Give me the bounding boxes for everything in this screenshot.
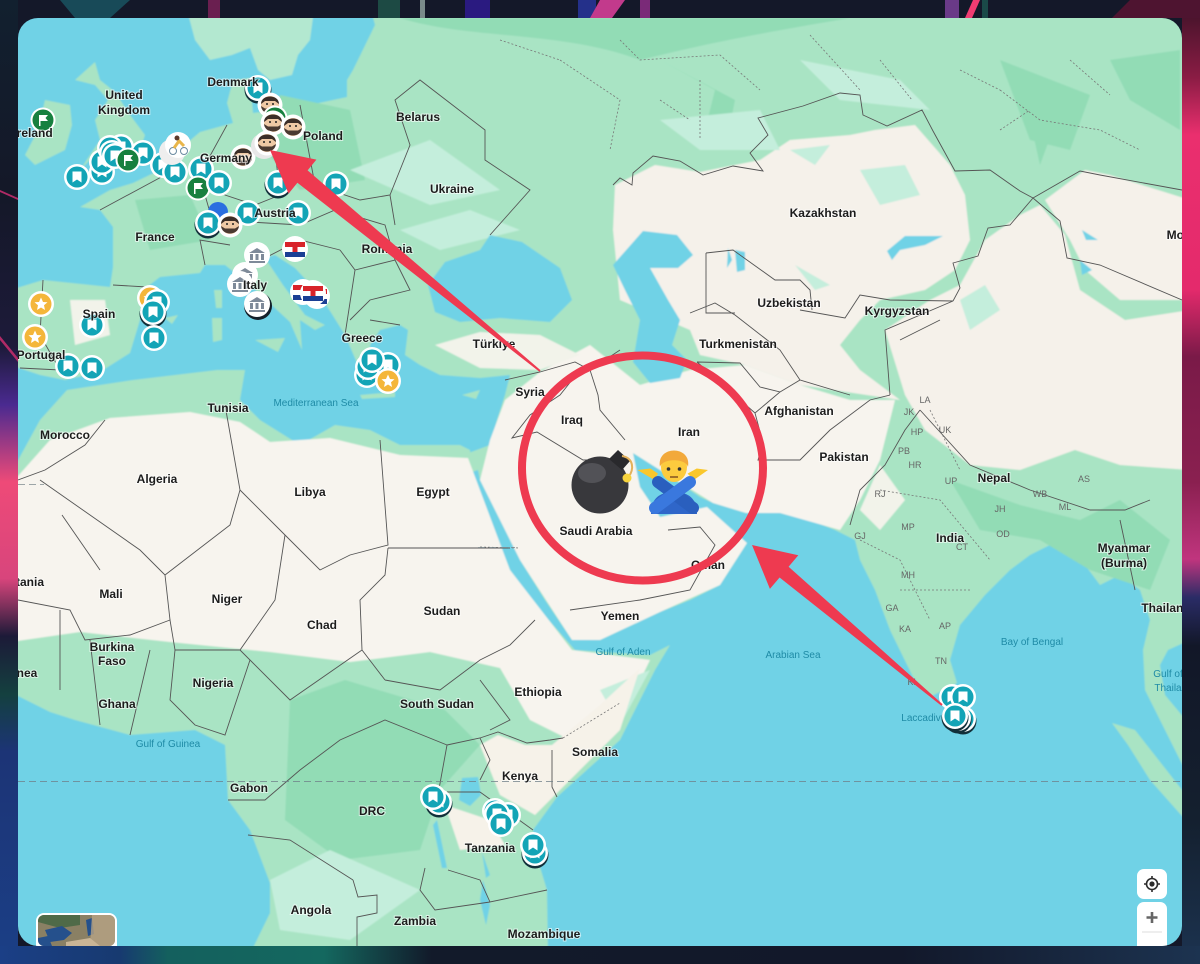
country labels: Kyrgyzstan [865, 304, 929, 318]
country labels: Ghana [98, 697, 136, 711]
country labels: Faso [98, 654, 126, 668]
state codes: AS [1078, 474, 1090, 484]
country labels: Saudi Arabia [560, 524, 633, 538]
state codes: OD [996, 529, 1010, 539]
country labels: Thailand [1141, 601, 1191, 615]
country labels: Syria [515, 385, 545, 399]
country labels: Nigeria [193, 676, 234, 690]
emoji: man gesturing no [642, 450, 704, 514]
country labels: Myanmar [1098, 541, 1151, 555]
state codes: AP [939, 621, 951, 631]
country labels: Libya [294, 485, 326, 499]
land: Africa [10, 370, 670, 954]
land: Mongolia and Gobi [1045, 170, 1190, 300]
state codes [854, 395, 1090, 687]
country labels: Belarus [396, 110, 440, 124]
country labels: Sudan [424, 604, 460, 618]
satellite thumbnail [36, 913, 117, 958]
country labels: Portugal [17, 348, 65, 362]
country labels: Denmark [207, 75, 259, 89]
land: Arabia and Middle East [480, 345, 895, 640]
state codes: JK [904, 407, 914, 417]
country labels: Nepal [978, 471, 1010, 485]
land: Turkey and Iberia dry areas [70, 300, 905, 530]
country labels: DRC [359, 804, 385, 818]
control: zoom buttons [1137, 902, 1167, 946]
country labels: Somalia [572, 745, 618, 759]
country labels: Iran [678, 425, 700, 439]
markers: Sri Lanka [939, 684, 976, 734]
country labels: Türkiye [473, 337, 516, 351]
country labels: United [105, 88, 143, 102]
country labels: Angola [291, 903, 332, 917]
state codes: MP [901, 522, 915, 532]
country labels: Pakistan [819, 450, 869, 464]
country labels: Ireland [13, 126, 53, 140]
state codes: GA [885, 603, 899, 613]
country labels: Kenya [502, 769, 538, 783]
black sea [428, 235, 572, 322]
red arrow to Oman [752, 545, 943, 706]
tropic dashed line [18, 484, 515, 548]
land: Scandinavia [188, 18, 314, 80]
country labels: Tunisia [207, 401, 249, 415]
country labels: France [135, 230, 175, 244]
country labels: Austria [254, 206, 296, 220]
country labels: Turkmenistan [699, 337, 777, 351]
sea labels: Laccadiv [901, 713, 941, 724]
state codes: JH [994, 504, 1006, 514]
country labels: Tanzania [465, 841, 516, 855]
land: Ethiopia and East Africa dry bands [445, 668, 640, 850]
markers: Iberia [22, 285, 170, 381]
markers: western Europe [30, 75, 349, 238]
state codes: CT [956, 542, 968, 552]
land: Sahara desert [10, 412, 650, 750]
country labels: Burkina [90, 640, 135, 654]
state codes: HR [908, 460, 922, 470]
caspian sea [613, 231, 693, 383]
country labels: Kazakhstan [790, 206, 856, 220]
marker: cyclist [159, 132, 191, 165]
sea labels: Gulf of Guinea [136, 739, 201, 750]
state codes: HP [911, 427, 923, 437]
sea labels: Bay of Bengal [1001, 637, 1063, 648]
country labels: Ethiopia [514, 685, 562, 699]
state codes: ML [1059, 502, 1071, 512]
sea labels: Gulf of [1153, 669, 1183, 680]
country labels: (Burma) [1101, 556, 1147, 570]
country labels: Afghanistan [764, 404, 834, 418]
markers: East Africa [420, 784, 548, 868]
country labels: Niger [212, 592, 243, 606]
sea labels: Arabian Sea [765, 650, 821, 661]
state codes: LA [919, 395, 931, 405]
control: locate button [1137, 869, 1167, 899]
country labels: Romania [362, 242, 413, 256]
sea labels: Mediterranean Sea [273, 398, 359, 409]
country labels: Morocco [40, 428, 90, 442]
state codes: TN [935, 656, 947, 666]
state codes: GJ [854, 531, 866, 541]
country labels: Zambia [394, 914, 436, 928]
country labels: Egypt [416, 485, 450, 499]
country labels: South Sudan [400, 697, 474, 711]
red arrow to Germany [270, 150, 541, 372]
country labels: Uzbekistan [757, 296, 821, 310]
country labels: Ukraine [430, 182, 474, 196]
sea labels [136, 398, 1183, 750]
country labels: Poland [303, 129, 343, 143]
country labels: Germany [200, 151, 252, 165]
country labels: Italy [243, 278, 267, 292]
sea labels: Thaila [1154, 683, 1182, 694]
land: green vegetation patches [135, 18, 1180, 860]
markers: profile faces [218, 92, 306, 238]
markers: Greece [354, 347, 401, 394]
country labels: Iraq [561, 413, 583, 427]
state codes: PB [898, 446, 910, 456]
land: Eurasia [10, 10, 1190, 780]
markers: Italy and Croatia [227, 236, 330, 320]
land: Great Britain and Ireland [25, 62, 145, 170]
equator dashed line [18, 781, 1180, 782]
country labels: India [936, 531, 964, 545]
country labels: Spain [83, 307, 115, 321]
state codes: MH [901, 570, 915, 580]
country labels: Algeria [137, 472, 178, 486]
country labels: Gabon [230, 781, 268, 795]
lakes [433, 230, 1098, 925]
sea labels: Gulf of Aden [595, 647, 651, 658]
country labels: Oman [691, 558, 725, 572]
land: Tibet and Xinjiang plateau [885, 205, 1190, 470]
country labels: Yemen [601, 609, 639, 623]
country labels: Mozambique [508, 927, 581, 941]
state codes: WB [1033, 489, 1047, 499]
country labels: Mali [99, 587, 123, 601]
state codes: UK [939, 425, 951, 435]
state codes: UP [945, 476, 957, 486]
emoji: bomb [572, 450, 632, 514]
state codes: KL [907, 677, 919, 687]
country labels: Kingdom [98, 103, 150, 117]
country labels: Greece [342, 331, 383, 345]
land: islands [165, 290, 1190, 825]
land: Kazakhstan desert [613, 125, 970, 400]
state codes: RJ [874, 489, 886, 499]
country labels: Chad [307, 618, 337, 632]
state codes: KA [899, 624, 911, 634]
red circle [522, 356, 763, 580]
